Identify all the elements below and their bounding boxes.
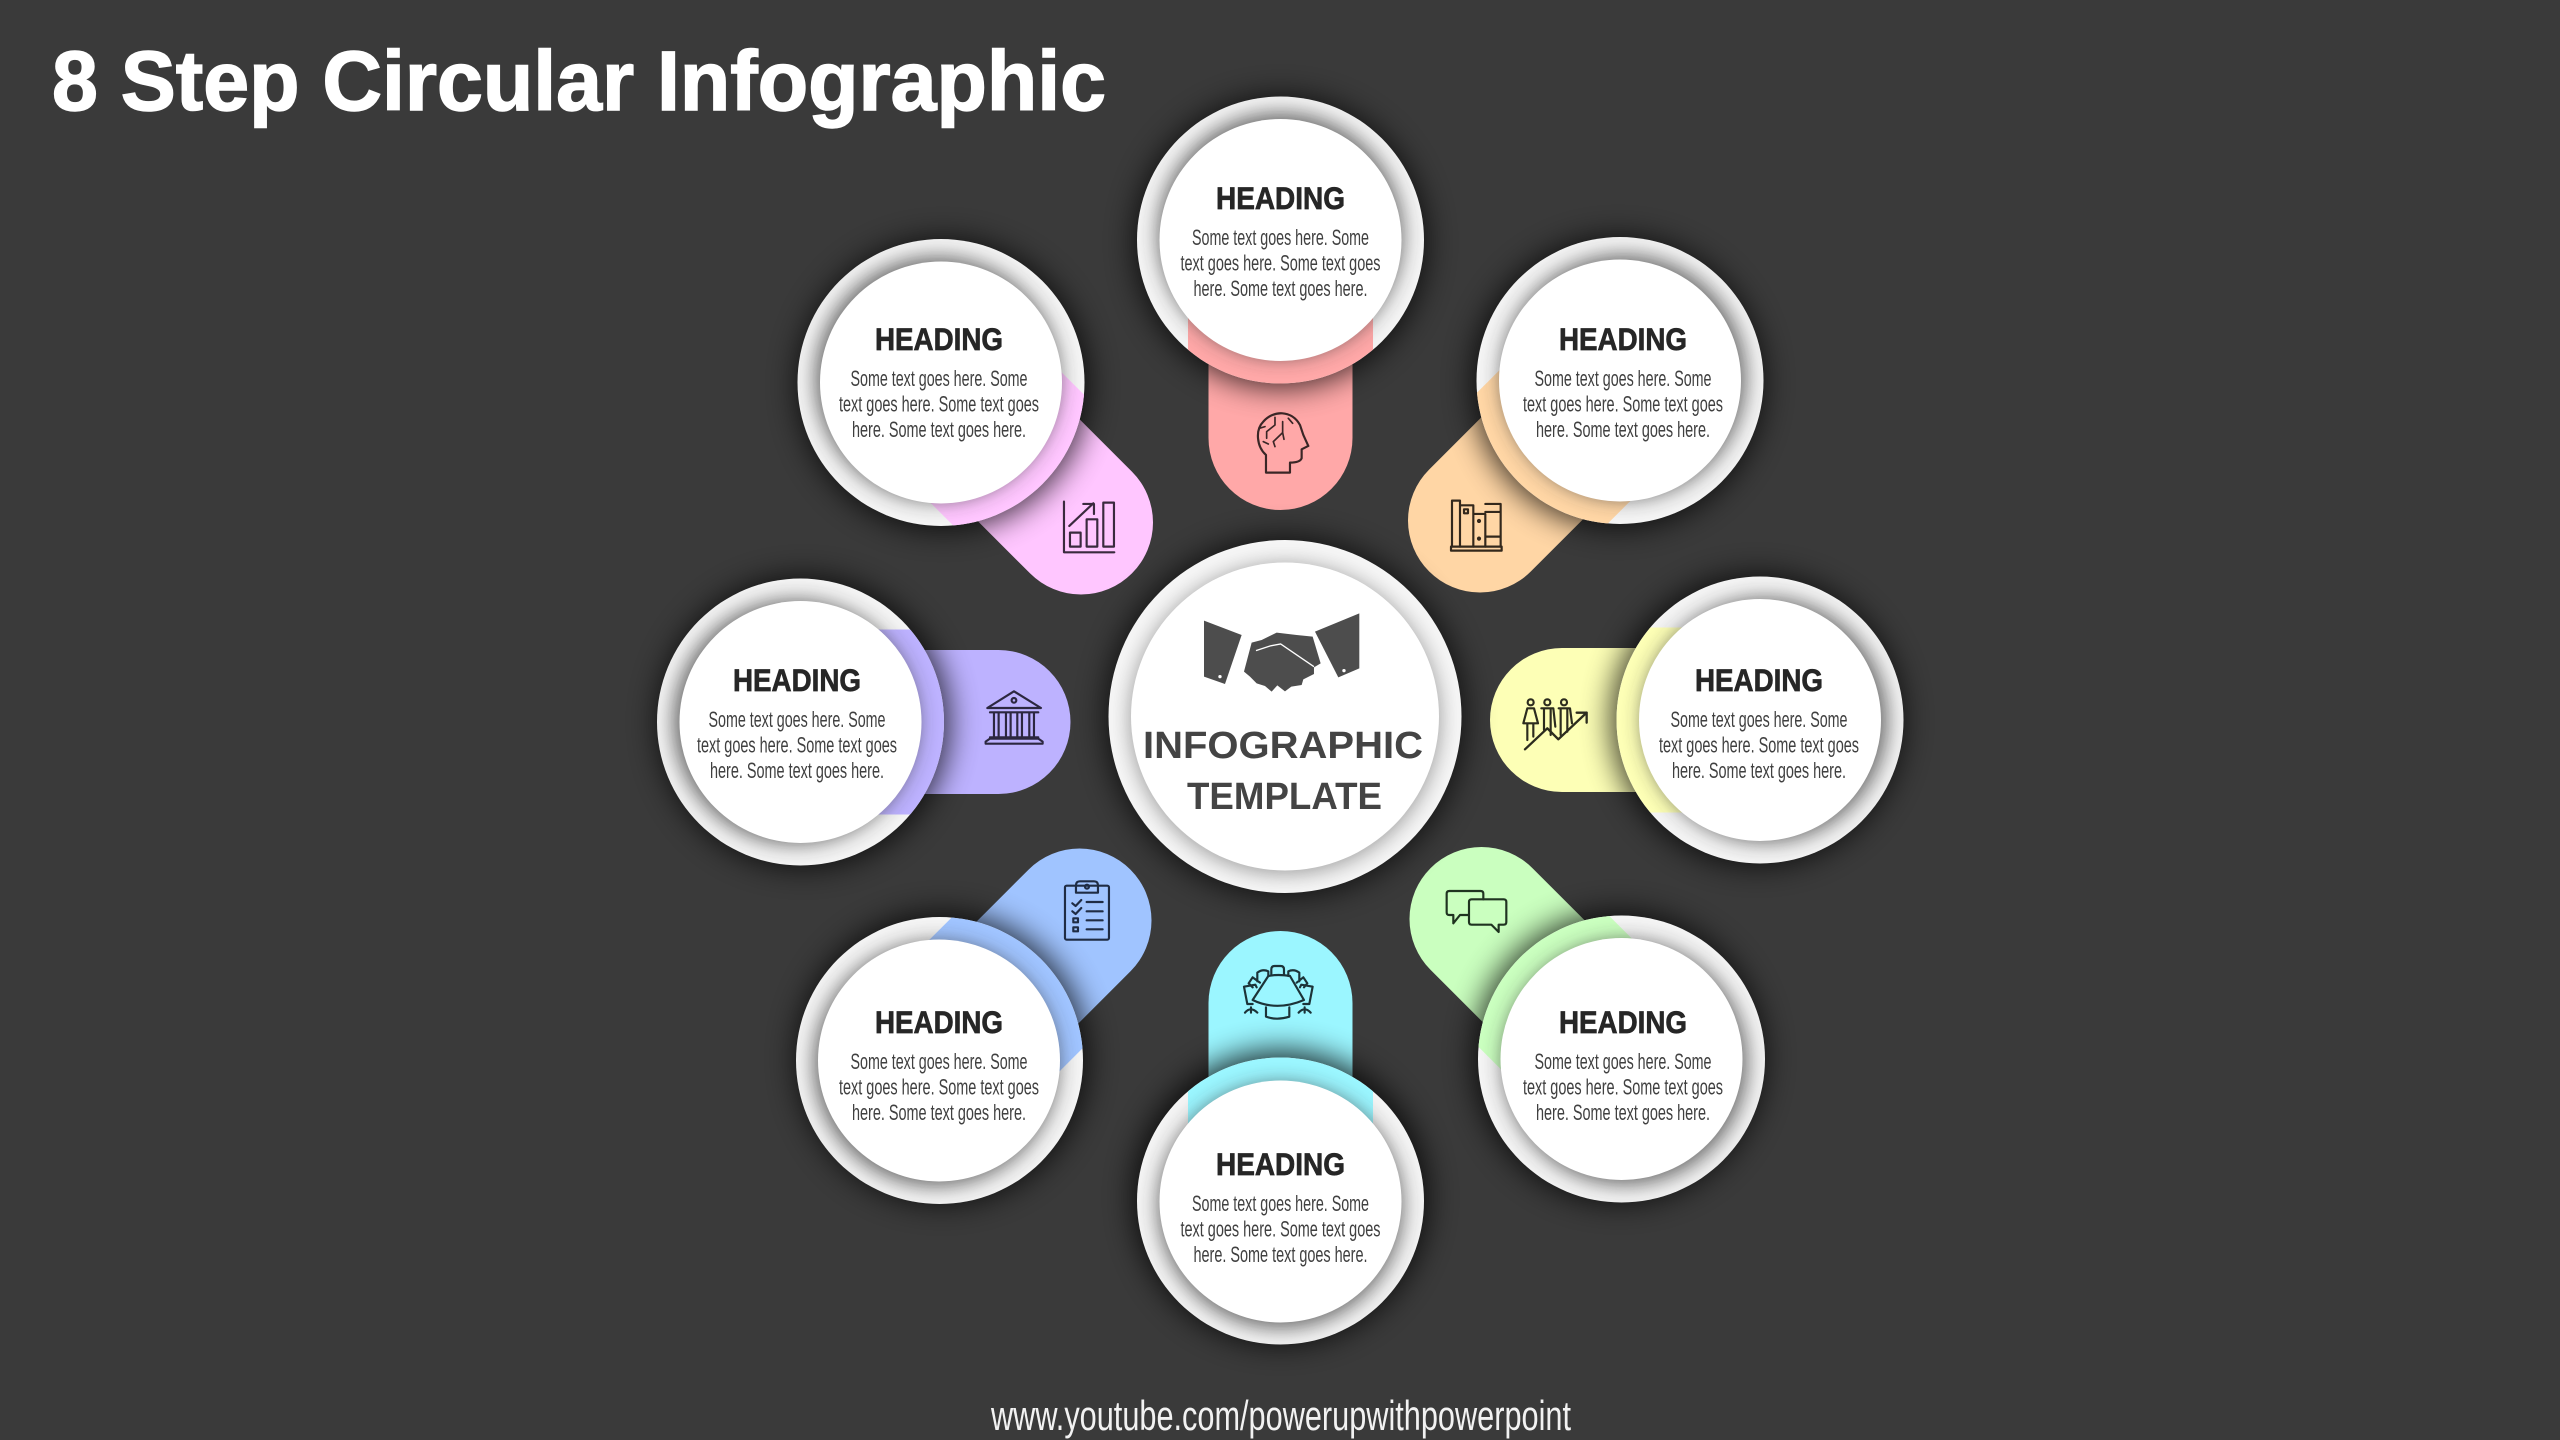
center heading	[1143, 725, 1423, 818]
heading: HEADING	[1216, 1146, 1345, 1182]
panel: step top-right (orange)	[1378, 236, 1764, 622]
body text: here. Some text goes here.	[1536, 417, 1710, 442]
body text	[1523, 366, 1723, 442]
tab: pink	[890, 332, 1183, 624]
body text: Some text goes here. Some	[708, 707, 886, 732]
body text: Some text goes here. Some	[850, 1049, 1028, 1074]
icon: handshake	[1204, 613, 1359, 692]
body text: Some text goes here. Some	[1534, 366, 1712, 391]
body text: Some text goes here. Some	[1192, 225, 1369, 250]
icon: books	[1451, 501, 1502, 551]
body text: here. Some text goes here.	[710, 758, 884, 783]
body text	[1523, 1049, 1723, 1125]
icon: bank building	[986, 691, 1043, 744]
tab: purple	[800, 650, 1070, 794]
body text: here. Some text goes here.	[1194, 1242, 1368, 1267]
body text: text goes here. Some text goes	[1523, 1074, 1723, 1100]
icon: chat bubbles	[1447, 891, 1506, 932]
heading: HEADING	[1559, 1004, 1687, 1040]
body text: text goes here. Some text goes	[1659, 732, 1859, 758]
body text: here. Some text goes here.	[1536, 1100, 1710, 1125]
center heading: INFOGRAPHIC	[1143, 725, 1423, 767]
icon: clipboard checklist	[1065, 881, 1109, 940]
text circle	[1639, 599, 1881, 841]
heading: HEADING	[1559, 321, 1687, 357]
panel: center circle	[1105, 536, 1465, 896]
body text: text goes here. Some text goes	[839, 392, 1039, 416]
body text: Some text goes here. Some	[1534, 1049, 1712, 1074]
body text	[697, 707, 897, 783]
tab: yellow	[1490, 648, 1760, 792]
body text: here. Some text goes here.	[852, 1100, 1026, 1125]
text circle	[680, 601, 922, 843]
panel: step bottom-left (blue)	[796, 819, 1181, 1204]
body text: Some text goes here. Some	[1670, 707, 1848, 732]
body text: Some text goes here. Some	[850, 366, 1028, 391]
body text: here. Some text goes here.	[1672, 758, 1846, 783]
heading: HEADING	[733, 662, 861, 698]
center heading: TEMPLATE	[1187, 776, 1382, 818]
panel: step bottom-right (green)	[1380, 817, 1765, 1203]
text circle	[818, 940, 1060, 1182]
tab: blue	[889, 819, 1181, 1111]
body text: text goes here. Some text goes	[1180, 250, 1380, 276]
icon: meeting table	[1244, 966, 1313, 1019]
body text: text goes here. Some text goes	[697, 732, 897, 758]
panel: step top-left (pink)	[797, 238, 1183, 624]
text circle	[1160, 1080, 1402, 1322]
heading: HEADING	[1216, 180, 1345, 216]
body text	[1659, 707, 1859, 783]
body text	[839, 1049, 1039, 1125]
title: 8 Step Circular Infographic	[52, 34, 1106, 128]
text circle	[820, 262, 1062, 504]
heading: HEADING	[1695, 662, 1823, 698]
text circle	[1160, 119, 1402, 361]
body text: Some text goes here. Some	[1192, 1191, 1369, 1216]
footer url: www.youtube.com/powerupwithpowerpoint	[990, 1392, 1571, 1439]
body text: text goes here. Some text goes	[1180, 1216, 1380, 1242]
icon: team growth	[1523, 699, 1587, 749]
body text: text goes here. Some text goes	[1523, 392, 1723, 416]
body text	[1180, 225, 1380, 301]
tab: red	[1208, 240, 1352, 510]
body text: here. Some text goes here.	[1194, 276, 1368, 301]
heading: HEADING	[875, 321, 1003, 357]
body text: here. Some text goes here.	[852, 417, 1026, 442]
panel: step bottom (cyan)	[1134, 931, 1428, 1344]
panel: step left (purple)	[657, 576, 1070, 868]
body text	[1180, 1191, 1380, 1267]
icon: bar chart with arrow	[1064, 502, 1114, 552]
panel: step right (yellow)	[1490, 574, 1904, 866]
body text: text goes here. Some text goes	[839, 1074, 1039, 1100]
panel: step top (red)	[1134, 96, 1426, 510]
tab: cyan	[1208, 931, 1352, 1201]
icon: brain head	[1258, 413, 1308, 473]
text circle	[1500, 938, 1742, 1180]
tab: green	[1380, 817, 1672, 1110]
body text	[839, 366, 1039, 442]
text circle	[1499, 260, 1741, 502]
heading: HEADING	[875, 1004, 1003, 1040]
tab: orange	[1378, 330, 1671, 622]
